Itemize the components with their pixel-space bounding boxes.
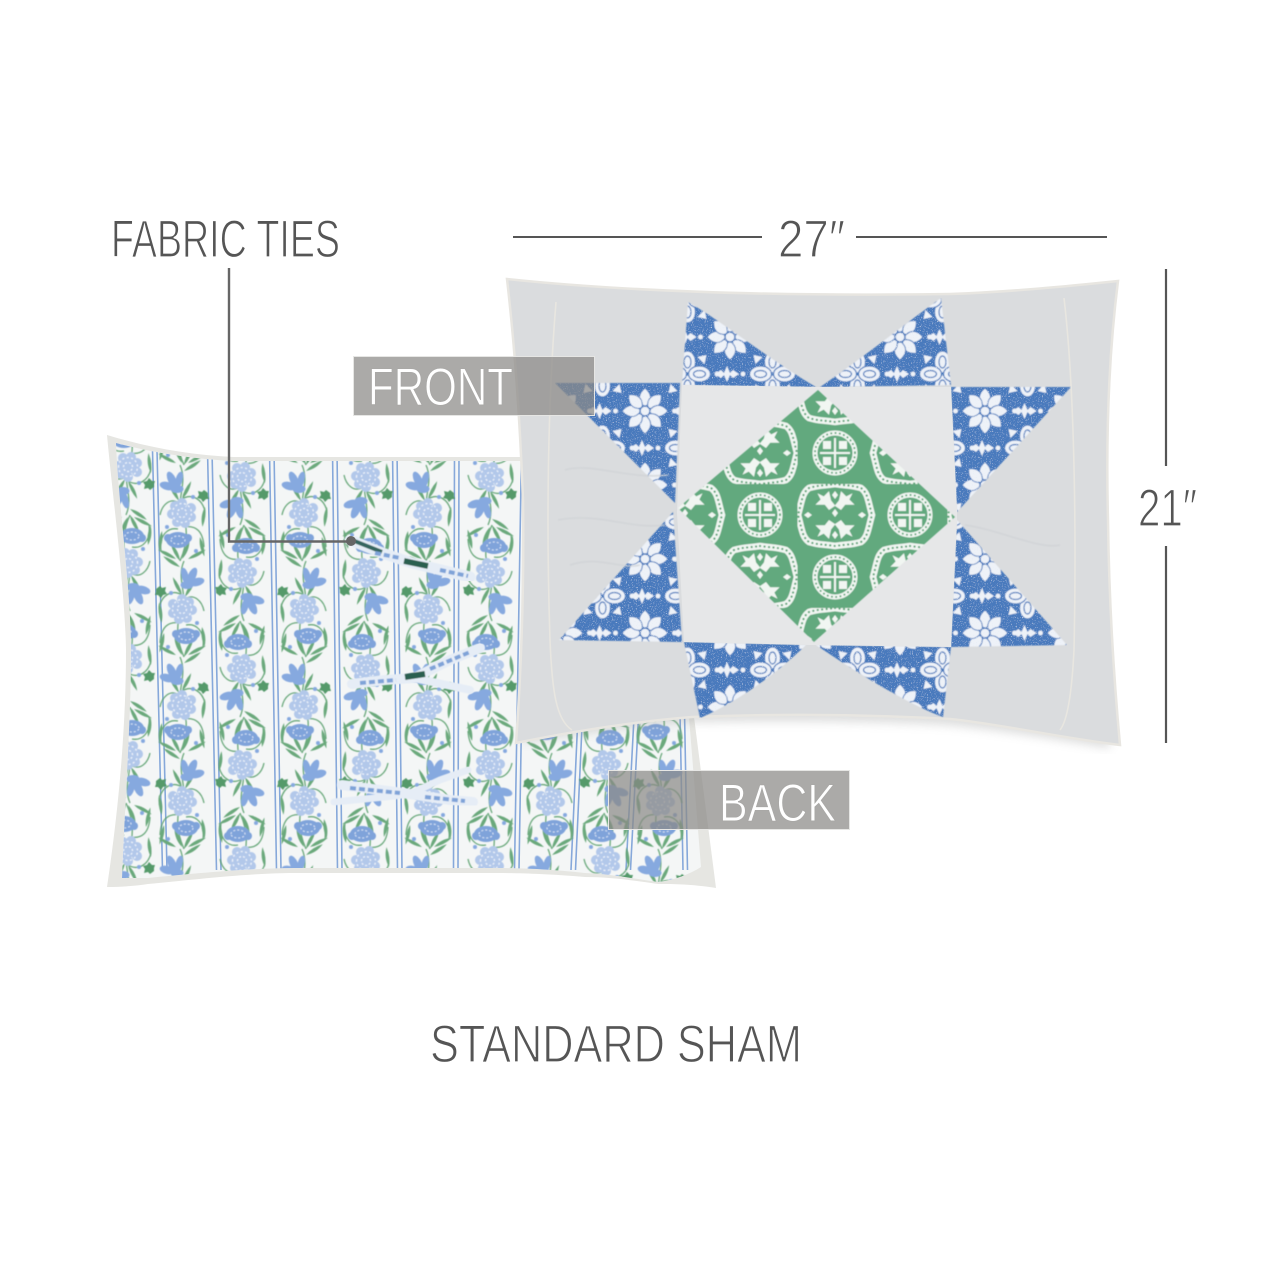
caption: standard sham: STANDARD SHAM xyxy=(430,1015,802,1074)
height line lower xyxy=(1165,546,1167,743)
width line right xyxy=(856,236,1107,238)
center block xyxy=(677,385,957,647)
fabric tie: middle xyxy=(352,648,480,690)
back pillow edge fabric xyxy=(107,435,720,888)
label: fabric ties callout xyxy=(111,210,356,546)
callout text: FABRIC TIES xyxy=(111,210,340,269)
BACK tag box xyxy=(608,770,850,830)
width value: 27″ xyxy=(778,210,845,269)
wrinkles xyxy=(558,468,1060,566)
label: BACK tag xyxy=(608,770,850,833)
height line upper xyxy=(1165,269,1167,466)
green center diamond xyxy=(678,390,955,642)
panel: front of sham pillow xyxy=(507,279,1120,748)
width line left xyxy=(513,236,762,238)
callout leader line xyxy=(229,268,350,542)
height value: 21″ xyxy=(1138,479,1197,538)
fabric tie: top xyxy=(350,540,470,577)
fabric tie: bottom xyxy=(334,770,473,802)
pillow body xyxy=(507,279,1120,745)
BACK tag text: BACK xyxy=(719,774,836,833)
back pillow striped floral print xyxy=(116,443,701,882)
pillow shadow xyxy=(522,690,1110,748)
label: FRONT tag xyxy=(354,356,594,417)
callout dot xyxy=(346,536,356,546)
panel: back of sham pillow xyxy=(107,435,716,888)
star points xyxy=(555,298,1071,718)
quilted seam xyxy=(548,298,1075,730)
FRONT tag text: FRONT xyxy=(368,358,513,417)
FRONT tag box xyxy=(354,356,594,416)
